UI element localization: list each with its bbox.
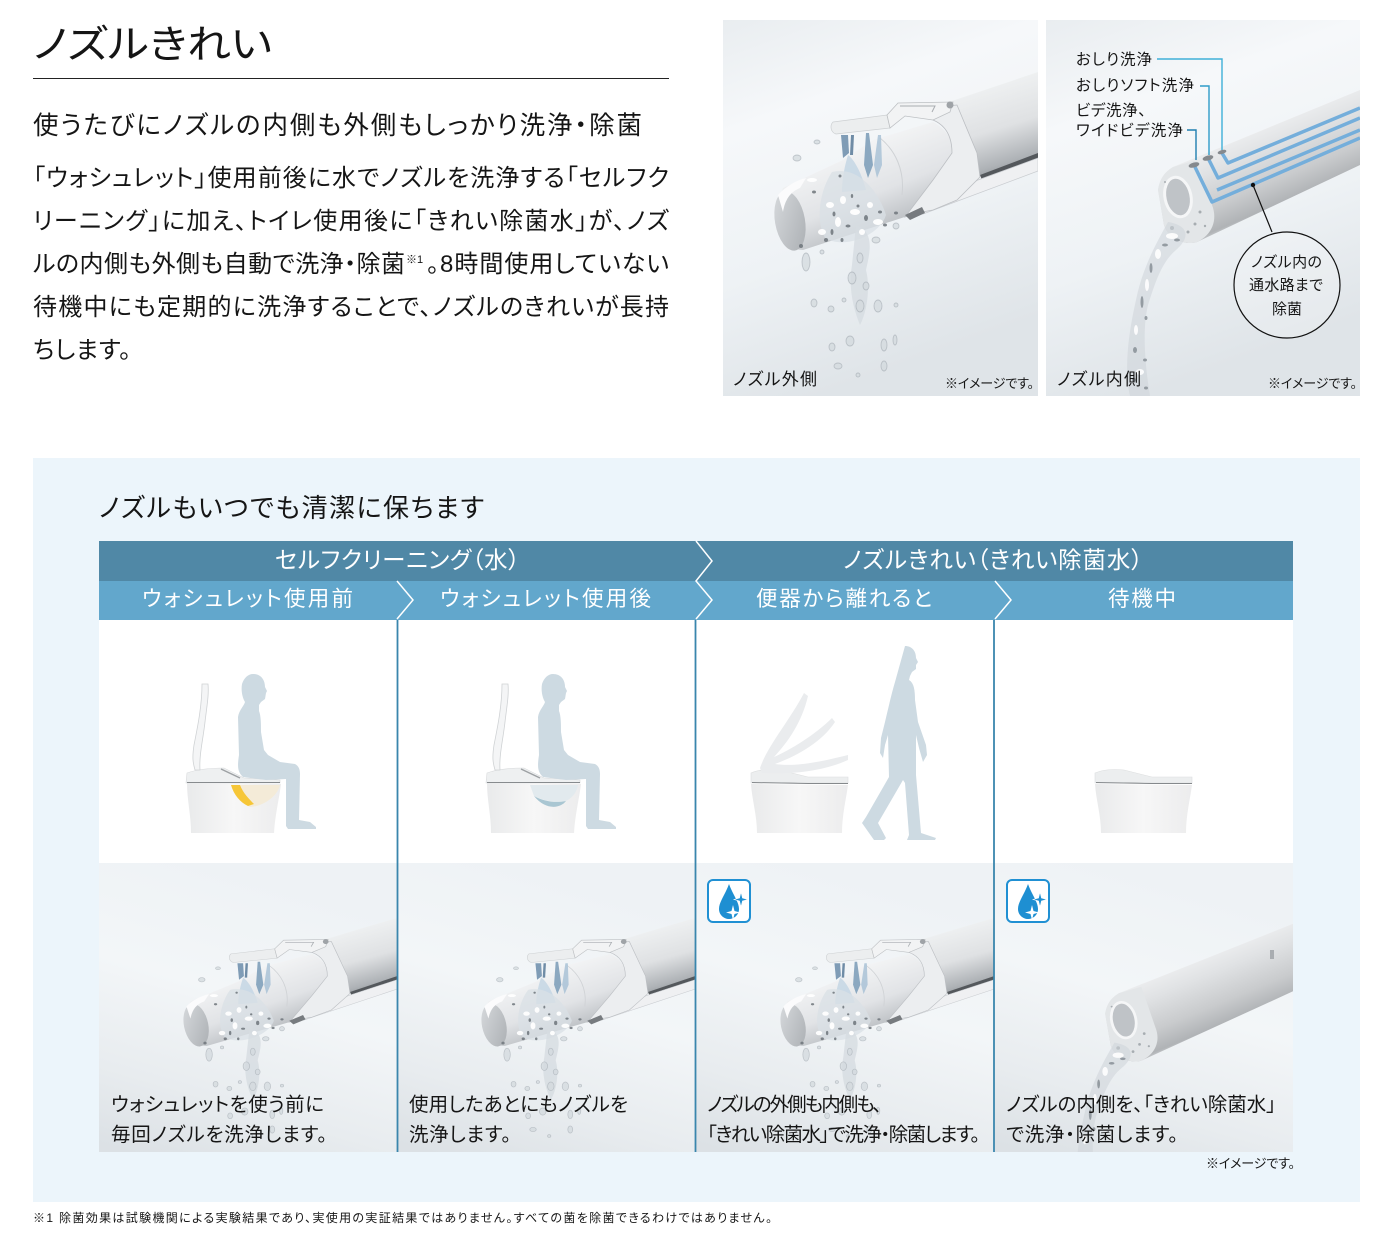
subheading: 使うたびにノズルの内側も外側もしっかり洗浄・除菌: [33, 112, 642, 140]
body text: 「ウォシュレット」使用前後に水でノズルを洗浄する「セルフク: [33, 165, 669, 192]
footnote: ※1 除菌効果は試験機関による実験結果であり、実使用の実証結果ではありません。すべての菌を除菌できるわけではありません。: [33, 1210, 772, 1225]
panel: step 3 photo: ノズルの外側も内側も、: [707, 1094, 882, 1116]
section heading: ノズルもいつでも清潔に保ちます: [99, 493, 484, 523]
panel: nozzle interior photo: ワイドビデ洗浄: [1076, 120, 1183, 140]
panel: step 1 photo: 毎回ノズルを洗浄します。: [111, 1124, 327, 1146]
panel: nozzle interior photo: ノズル内側: [1057, 370, 1141, 389]
panel: nozzle exterior photo: [723, 20, 1038, 396]
panel: nozzle interior photo: ノズル内の: [1251, 254, 1322, 271]
header bands: セルフクリーニング（水）: [275, 547, 520, 573]
panel: nozzle interior photo: おしり洗浄: [1076, 50, 1152, 68]
header bands: ウォシュレット使用後: [440, 587, 651, 611]
illustration: standby: [1095, 769, 1192, 833]
header bands: ウォシュレット使用前: [142, 587, 353, 611]
panel: nozzle exterior photo: ※イメージです。: [945, 376, 1034, 391]
header bands: 待機中: [1108, 587, 1176, 611]
body text: ※1: [406, 254, 423, 266]
column dividers: [398, 620, 994, 1152]
panel: step 3 photo: 「きれい除菌水」で洗浄・除菌します。: [707, 1124, 980, 1146]
illustration: after use: [486, 674, 616, 833]
header bands: 便器から離れると: [756, 587, 932, 611]
body text: 待機中にも定期的に洗浄することで、ノズルのきれいが長持: [33, 294, 669, 321]
panel: step 3 photo: [696, 863, 994, 1152]
white illustration row: [99, 620, 1293, 863]
panel: nozzle interior photo: [1046, 20, 1360, 396]
panel: step 4 photo: ノズルの内側を、「きれい除菌水」: [1006, 1094, 1276, 1116]
panel: nozzle interior photo: ※イメージです。: [1268, 376, 1357, 391]
body text: ルの内側も外側も自動で洗浄・除菌: [33, 251, 405, 278]
image note: ※イメージです。: [1206, 1156, 1295, 1171]
illustration: leaving the toilet: [751, 646, 936, 840]
panel: nozzle exterior photo: ノズル外側: [733, 370, 817, 389]
header bands: ノズルきれい（きれい除菌水）: [843, 547, 1143, 573]
panel: step 2 photo: [398, 918, 695, 1152]
illustration: before use: [186, 674, 316, 833]
panel: nozzle interior photo: 除菌: [1272, 301, 1302, 318]
title: ノズルきれい: [33, 24, 272, 67]
panel: nozzle interior photo: ビデ洗浄、: [1076, 100, 1146, 120]
panel: step 4 photo: で洗浄・除菌します。: [1006, 1124, 1178, 1146]
panel: nozzle interior photo: 通水路まで: [1249, 277, 1323, 294]
body text: [33, 165, 669, 364]
panel: lower section background: [33, 458, 1360, 1202]
panel: step 2 photo: 洗浄します。: [409, 1124, 511, 1146]
panel: step 1 photo: [99, 918, 397, 1152]
header bands: [99, 541, 1293, 620]
body text: 。8時間使用していない: [427, 251, 669, 278]
panel: step 2 photo: 使用したあとにもノズルを: [409, 1094, 628, 1116]
body text: ちします。: [33, 337, 131, 364]
body text: リーニング」に加え、トイレ使用後に「きれい除菌水」が、ノズ: [33, 208, 669, 235]
panel: step 4 photo: [995, 879, 1293, 1152]
panel: nozzle interior photo: おしりソフト洗浄: [1076, 76, 1194, 94]
panel: step 1 photo: ウォシュレットを使う前に: [111, 1094, 324, 1116]
